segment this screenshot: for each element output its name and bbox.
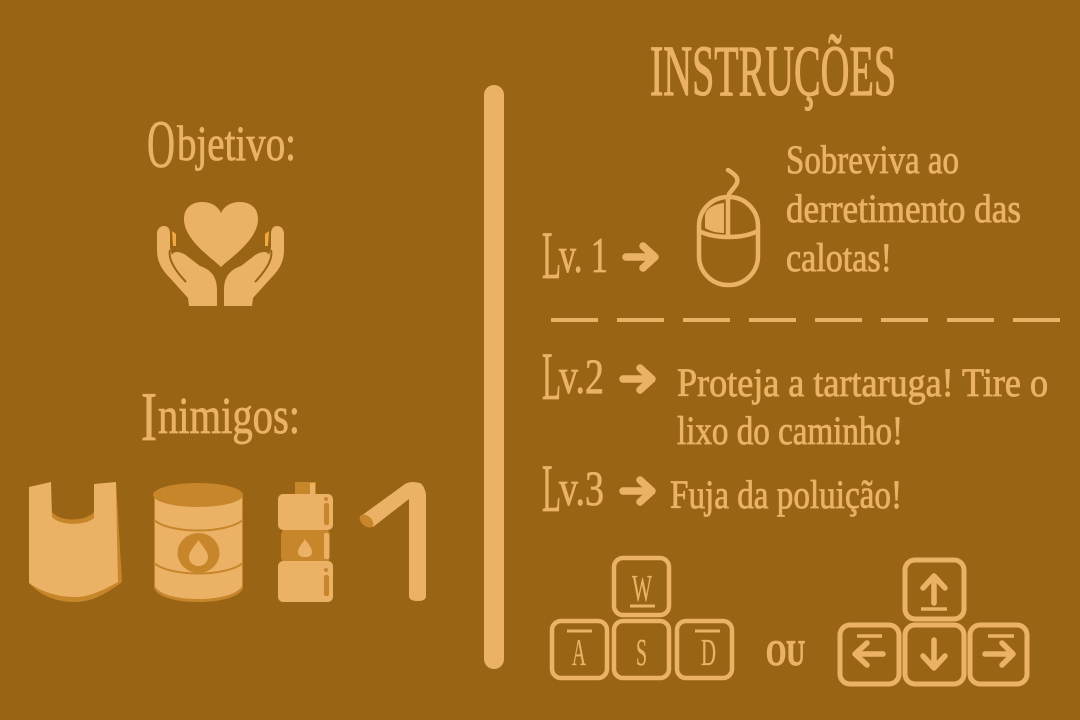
arrow: level 1 (626, 246, 655, 268)
level 3 label: L (542, 450, 561, 526)
level 1 text: calotas! (786, 235, 892, 280)
heading: Inimigos: I (141, 379, 157, 456)
level 1 text: Sobreviva ao (786, 137, 959, 182)
level 2 text (677, 360, 1048, 453)
icon: plastic bag (29, 482, 122, 602)
dashed separator (551, 318, 1060, 322)
heading: Inimigos: nimigos: (158, 388, 300, 445)
level 1 text (786, 137, 1021, 280)
arrow: level 2 (623, 368, 652, 390)
heading: Objetivo: O (147, 106, 175, 182)
arrow: level 3 (623, 480, 652, 502)
keys: WASD: D (701, 632, 716, 674)
heading: Objetivo: bjetivo: (177, 115, 296, 171)
level 1 text: derretimento das (786, 186, 1021, 231)
keys: WASD: S (636, 632, 647, 674)
level 2 text: lixo do caminho! (677, 408, 903, 453)
level 1 label: v. 1 (559, 227, 608, 283)
text: ou: OU (766, 633, 805, 673)
level 2 text: Proteja a tartaruga! Tire o (677, 360, 1048, 405)
icon: hand highlights (172, 231, 269, 246)
keys: WASD (552, 558, 732, 678)
icon: oil barrel (153, 483, 243, 602)
keys: arrows (840, 560, 1027, 684)
keys: WASD: W (632, 568, 652, 610)
vertical divider (484, 85, 504, 669)
level 1 label: L (542, 217, 561, 293)
level 3 text: Fuja da poluição! (670, 472, 902, 517)
icon: mouse (699, 170, 758, 285)
level 3 label: v.3 (559, 460, 604, 516)
icon: drinking straw (357, 482, 426, 601)
icon: hands holding heart (157, 202, 284, 306)
keys: WASD: A (572, 632, 586, 674)
level 2 label: v.2 (559, 348, 604, 404)
icon: plastic bottle (278, 482, 333, 602)
level 2 label: L (542, 338, 561, 414)
